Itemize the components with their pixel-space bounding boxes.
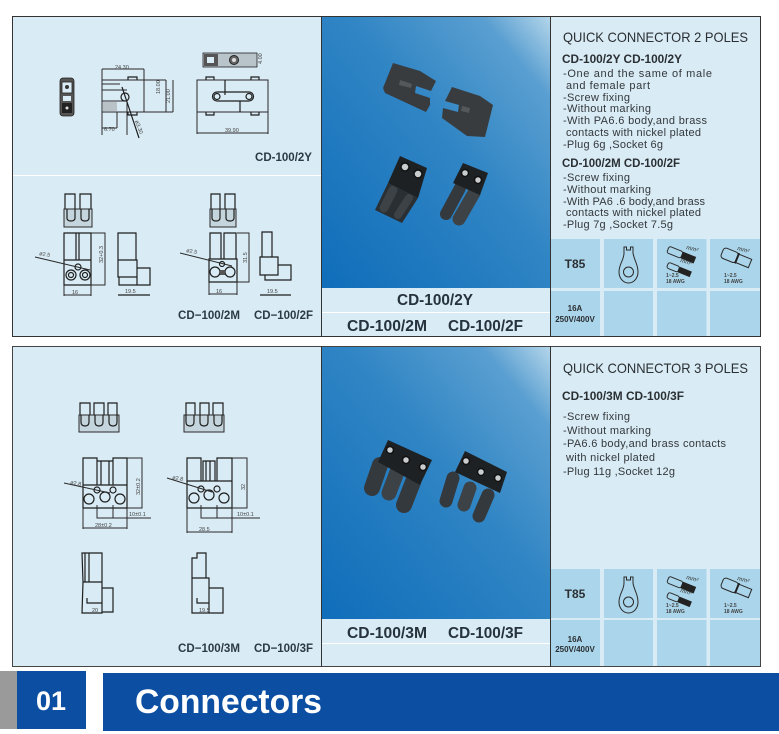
label: CD-100/3F: CD−100/3F: [254, 641, 313, 655]
table: 2 pole ratings: [550, 239, 760, 337]
drawing: CD-100/3F top and front view: ø2.8: [172, 475, 184, 483]
text block: CD-100/2Y specification: contacts with nickel plated: [566, 127, 701, 139]
table: 3 pole ratings: 250V/400V: [555, 645, 595, 654]
drawing: CD-100/2M views: 32+0.3: [99, 246, 105, 263]
icon: bare wire: 18 AWG: [724, 279, 743, 285]
text block: CD-100/2Y specification: CD-100/2Y CD-100/2Y: [562, 52, 682, 66]
drawing: CD-100/2M views: ø2.5: [39, 251, 51, 259]
panel: 2 pole technical drawings: [12, 16, 322, 336]
icon: ferrule wires: 18 AWG: [666, 609, 685, 615]
caption strip: CD-100/2M: [347, 318, 427, 335]
drawing: CD-100/3F top and front view: [167, 403, 260, 533]
panel: quick connector 3 poles: [12, 346, 760, 667]
drawing: CD-100/2Y side view: 6.70: [104, 127, 115, 133]
drawing: CD-100/2Y end view: [60, 78, 74, 116]
caption strip: CD-100/2F: [448, 318, 523, 335]
drawing: CD-100/3F side view: 19.5: [199, 608, 210, 614]
text block: CD-100/3M specification: -Plug 11g ,Socket 12g: [563, 466, 675, 478]
label: CD-100/3M: CD−100/3M: [178, 641, 240, 655]
heading: quick connector 2 poles: QUICK CONNECTOR 2 POLES: [563, 29, 748, 45]
table: 2 pole ratings: 16A: [568, 304, 583, 313]
panel: 3 pole description: [550, 346, 760, 667]
icon: ferrule wires: [666, 575, 700, 615]
photo: CD-100/2F connector: [446, 163, 488, 219]
panel: 2 pole description: [550, 16, 760, 337]
drawing: CD-100/3F top and front view: 28.5: [199, 527, 210, 533]
icon: ferrule wires: mm²: [685, 245, 700, 254]
panel: 3 pole product photo: [321, 346, 550, 667]
drawing: CD-100/2M views: [35, 194, 150, 296]
caption strip: [321, 288, 550, 337]
table: 2 pole ratings: 250V/400V: [555, 315, 595, 324]
drawing: CD-100/2Y side view: 24.30: [115, 65, 129, 71]
caption strip: CD-100/3F: [448, 625, 523, 642]
drawing: CD-100/2Y side view: [102, 65, 173, 138]
text block: CD-100/3M specification: -PA6.6 body,and brass contacts: [563, 438, 726, 450]
section title banner: [103, 673, 779, 731]
icon: ferrule wires: mm²: [685, 575, 700, 584]
table: 2 pole ratings: T85: [565, 257, 586, 271]
text block: CD-100/2M specification: -Without marking: [563, 184, 651, 196]
drawing: CD-100/3M top and front view: 28±0.2: [95, 523, 112, 529]
icon: ferrule wires: mm²: [679, 258, 694, 267]
drawing: CD-100/2Y side view: 18.00: [156, 80, 162, 94]
label: CD-100/2Y: CD-100/2Y: [255, 150, 312, 164]
panel: 2 pole product photo: [321, 16, 550, 337]
photo: CD-100/3M connector: [372, 440, 432, 505]
caption strip: [321, 619, 550, 667]
text block: CD-100/2Y specification: -Screw fixing: [563, 92, 630, 104]
icon: ferrule wires: 1~2.5: [666, 273, 679, 279]
icon: bare wire: 1~2.5: [724, 273, 737, 279]
drawing: CD-100/2F views: 31.5: [243, 252, 249, 263]
icon: ring terminal: [619, 577, 638, 613]
section number tab: [0, 671, 86, 729]
drawing: CD-100/3M side view: [82, 553, 113, 614]
section number tab: 01: [36, 686, 66, 716]
drawing: CD-100/3M side view: 20: [92, 608, 98, 614]
text block: CD-100/2Y specification: -One and the same of male: [563, 68, 712, 80]
text block: CD-100/2Y specification: -With PA6.6 body,and brass: [563, 115, 708, 127]
drawing: CD-100/2F views: ø2.5: [186, 248, 198, 256]
text block: CD-100/2M specification: contacts with nickel plated: [566, 207, 701, 219]
panel: quick connector 2 poles: [12, 16, 760, 337]
icon: bare wire: 1~2.5: [724, 603, 737, 609]
drawing: CD-100/2Y top and front view: 4.00: [258, 53, 264, 64]
photo: CD-100/2Y connector pair: [383, 63, 493, 137]
panel: 3 pole technical drawings: [12, 346, 322, 666]
text block: CD-100/2Y specification: -Plug 6g ,Socket 6g: [563, 139, 663, 151]
icon: bare wire: mm²: [736, 576, 751, 585]
drawing: CD-100/2Y side view: ø3.30: [133, 120, 144, 135]
label: CD-100/2M: CD−100/2M: [178, 308, 240, 322]
drawing: CD-100/2Y top and front view: [197, 53, 268, 134]
icon: ferrule wires: 18 AWG: [666, 279, 685, 285]
text block: CD-100/2M specification: CD-100/2M CD-100/2F: [562, 156, 680, 170]
drawing: CD-100/3M top and front view: ø2.8: [70, 480, 82, 488]
table: 3 pole ratings: 16A: [568, 635, 583, 644]
drawing: CD-100/3M top and front view: 32±0.2: [136, 478, 142, 495]
drawing: CD-100/3M top and front view: [64, 403, 151, 529]
drawing: CD-100/2Y top and front view: 39.90: [225, 128, 239, 134]
photo: CD-100/2M connector: [375, 156, 427, 223]
text block: CD-100/2M specification: [562, 156, 706, 231]
drawing: CD-100/3F top and front view: 10±0.1: [237, 512, 254, 518]
icon: bare wire: [720, 576, 752, 615]
icon: bare wire: 18 AWG: [724, 609, 743, 615]
text block: CD-100/3M specification: with nickel plated: [565, 452, 655, 464]
drawing: CD-100/2M views: 16: [72, 290, 78, 296]
table: 3 pole ratings: T85: [565, 587, 586, 601]
table: 3 pole ratings: [550, 569, 760, 667]
icon: ferrule wires: [666, 245, 700, 285]
drawing: CD-100/2Y side view: 21.00: [166, 89, 172, 103]
text block: CD-100/2Y specification: [562, 52, 712, 151]
text block: CD-100/2M specification: -With PA6 .6 body,and brass: [563, 196, 706, 208]
text block: CD-100/2M specification: -Screw fixing: [563, 172, 630, 184]
drawing: CD-100/2F views: 19.5: [267, 289, 278, 295]
text block: CD-100/3M specification: -Screw fixing: [563, 411, 630, 423]
icon: bare wire: mm²: [736, 246, 751, 255]
section title banner: Connectors: [135, 683, 322, 721]
icon: ring terminal: [619, 247, 638, 283]
text block: CD-100/3M specification: CD-100/3M CD-100/3F: [562, 389, 684, 403]
text block: CD-100/2M specification: -Plug 7g ,Socket 7.5g: [563, 219, 673, 231]
icon: ferrule wires: 1~2.5: [666, 603, 679, 609]
text block: CD-100/3M specification: -Without marking: [563, 425, 651, 437]
photo: CD-100/3F connector: [446, 451, 507, 516]
label: CD-100/2F: CD−100/2F: [254, 308, 313, 322]
text block: CD-100/3M specification: [562, 389, 726, 478]
drawing: CD-100/2F views: [180, 194, 291, 295]
caption strip: CD-100/2Y: [397, 292, 474, 309]
drawing: CD-100/3M top and front view: 10±0.1: [129, 512, 146, 518]
drawing: CD-100/3F side view: [192, 553, 223, 614]
drawing: CD-100/2F views: 16: [216, 289, 222, 295]
drawing: CD-100/3F top and front view: 32: [241, 484, 247, 490]
text block: CD-100/2Y specification: and female part: [566, 80, 650, 92]
text block: CD-100/2Y specification: -Without marking: [563, 103, 651, 115]
icon: bare wire: [720, 246, 752, 285]
heading: quick connector 3 poles: QUICK CONNECTOR 3 POLES: [563, 360, 748, 376]
icon: ferrule wires: mm²: [679, 588, 694, 597]
drawing: CD-100/2M views: 19.5: [125, 289, 136, 295]
caption strip: CD-100/3M: [347, 625, 427, 642]
